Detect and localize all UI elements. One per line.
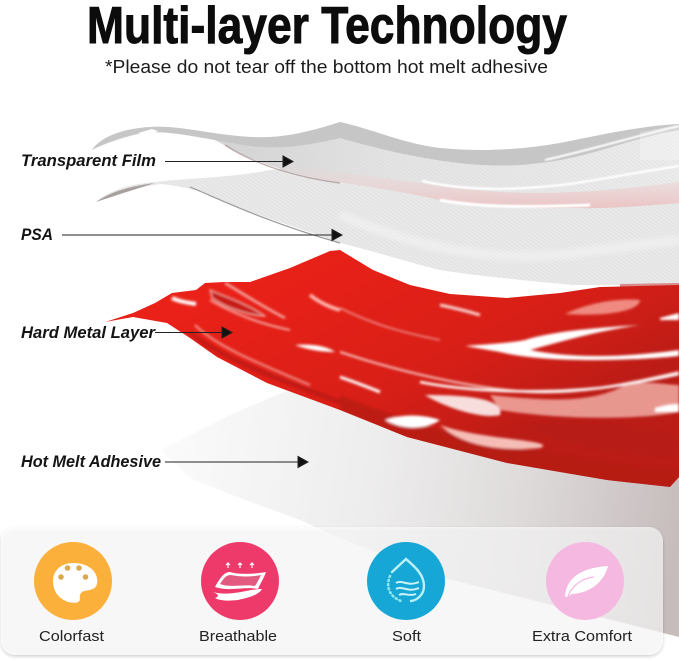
label: Transparent Film: Transparent Film xyxy=(21,152,156,170)
label: PSA: PSA xyxy=(21,226,53,244)
layer: hot melt adhesive xyxy=(160,370,679,637)
layer: PSA xyxy=(96,165,679,290)
label: Breathable: Breathable xyxy=(199,629,277,645)
icon: water drop (Soft) xyxy=(367,542,445,620)
arrow: Hard Metal Layer xyxy=(155,327,232,338)
layer: transparent film xyxy=(92,122,679,208)
icon: breathable fabric xyxy=(201,542,279,620)
label: Colorfast: Colorfast xyxy=(39,629,104,645)
arrow: Transparent Film xyxy=(165,156,293,167)
icon: palette (Colorfast) xyxy=(34,542,112,620)
feature panel xyxy=(1,527,663,655)
icon: feather leaf (Extra Comfort) xyxy=(546,542,624,620)
arrow: PSA xyxy=(62,230,342,240)
label: Hard Metal Layer: Hard Metal Layer xyxy=(21,324,157,342)
layer: hard metal xyxy=(105,250,679,487)
arrow: Hot Melt Adhesive xyxy=(165,456,308,468)
label: Soft: Soft xyxy=(392,629,421,645)
label: Extra Comfort: Extra Comfort xyxy=(532,629,632,645)
label: Hot Melt Adhesive: Hot Melt Adhesive xyxy=(21,453,161,471)
subtitle: *Please do not tear off the bottom hot melt adhesive xyxy=(105,57,548,77)
